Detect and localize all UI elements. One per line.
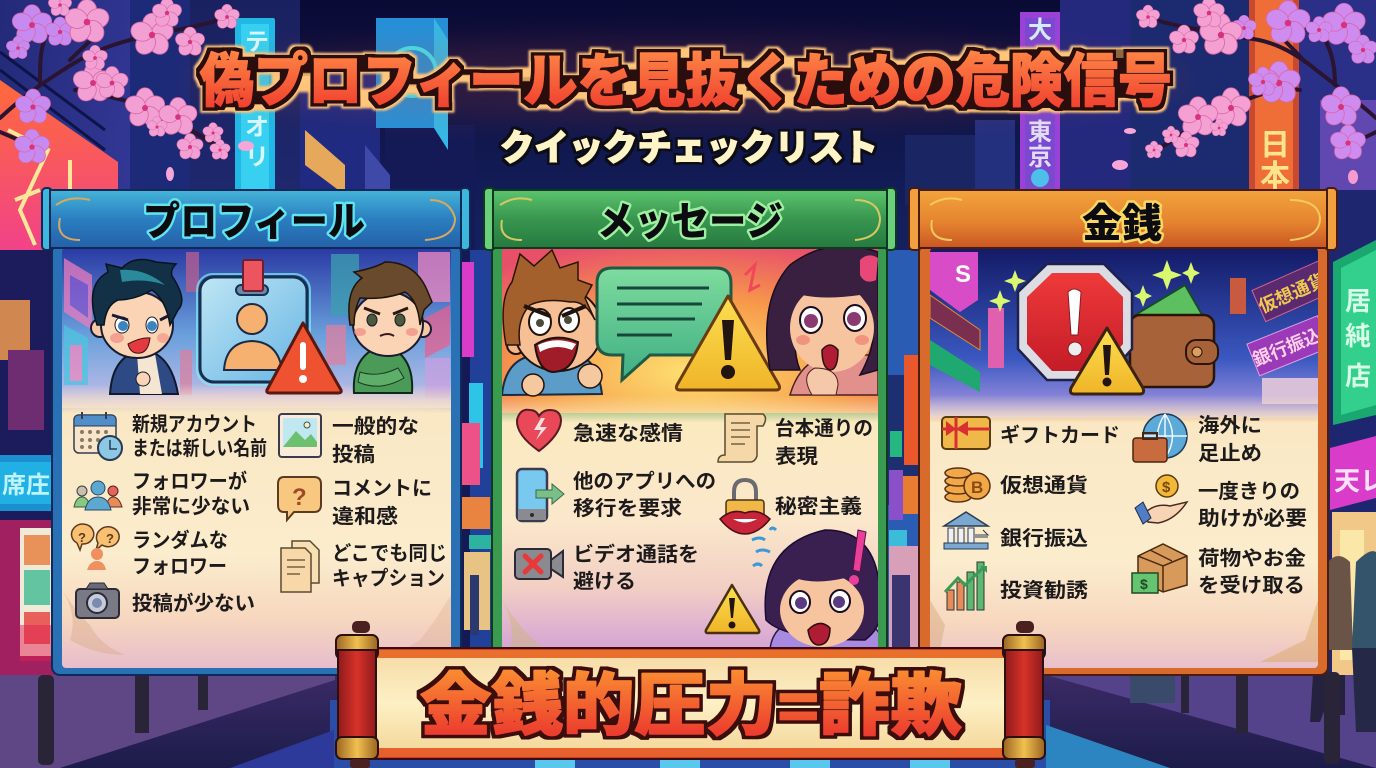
text: one-time help: 一度きりの	[1198, 480, 1300, 503]
title: 偽プロフィールを見抜くための危険信号	[200, 49, 1172, 114]
item: one-time help	[1135, 475, 1307, 530]
text: receiving packages: を受け取る	[1198, 574, 1305, 597]
neon sign: purple Tokyo	[1020, 12, 1060, 192]
icon: picture	[279, 414, 321, 457]
text: secrecy: 秘密主義	[775, 495, 862, 518]
icon: question bubbles and person: ?	[78, 530, 86, 545]
icon: globe and suitcase	[1133, 414, 1187, 462]
neon sign: cyan vertical: テ	[245, 29, 269, 56]
item: scripted	[718, 414, 873, 468]
text: generic posts	[332, 415, 419, 466]
text: crypto: 仮想通貨	[1000, 473, 1088, 497]
posts and bollards	[38, 675, 1248, 765]
text: odd comments: 違和感	[332, 504, 398, 528]
text: one-time help	[1198, 480, 1307, 530]
neon sign: purple Tokyo: 京	[1028, 144, 1052, 171]
text: avoid video: 避ける	[573, 570, 636, 593]
left shopfront strip	[0, 250, 125, 715]
banner body	[375, 648, 1007, 759]
item: random followers	[72, 524, 228, 578]
text: receiving packages: 荷物やお金	[1198, 547, 1306, 570]
text: random followers	[132, 528, 228, 578]
icon: group of people	[74, 481, 122, 510]
icon: lock with lips	[720, 480, 770, 534]
text: investment: 投資勧誘	[1000, 579, 1088, 602]
icon: calendar clock	[74, 412, 122, 460]
panel: money	[909, 188, 1337, 675]
text: stuck overseas	[1198, 414, 1262, 465]
text: one-time help: 助けが必要	[1198, 506, 1307, 530]
text: bank transfer: 銀行振込	[1000, 527, 1088, 550]
icon: hand with coin: $	[1162, 479, 1171, 496]
icon: small warning triangle	[706, 585, 759, 633]
item: new account	[74, 412, 267, 460]
panel frame	[919, 244, 1328, 675]
title glow	[186, 38, 1186, 122]
text: odd comments	[332, 478, 432, 528]
cherry blossoms: top right	[1112, 0, 1376, 184]
icon: small warning triangle	[1070, 328, 1144, 394]
text: app move: 移行を要求	[573, 497, 682, 520]
item: odd comments	[278, 477, 432, 528]
ornaments bottom corners	[62, 590, 125, 655]
icon: question bubbles and person: ?	[106, 531, 114, 546]
neon sign: red left	[0, 80, 118, 262]
neon sign: orange Japan: 日	[1260, 129, 1290, 162]
icon: box and money: $	[1140, 576, 1148, 592]
text: scripted: 表現	[775, 445, 818, 468]
left shopfront strip: 席庄工	[2, 472, 74, 499]
icon: profile ID card with warning	[197, 260, 341, 393]
right shopfront strip: 純	[1345, 321, 1371, 351]
item: gift card	[942, 417, 1120, 449]
panel scene: money: S	[955, 261, 971, 288]
icon: bank	[944, 512, 988, 549]
icon: green speech bubble	[597, 268, 731, 380]
icon: camera	[76, 583, 119, 618]
text: same captions	[332, 542, 447, 590]
item: investment	[945, 562, 1088, 610]
text: app move	[573, 470, 716, 520]
panel scene: money	[930, 248, 1335, 675]
item: receiving packages	[1132, 544, 1306, 597]
panel scene: messages	[502, 246, 886, 670]
item: app move	[517, 469, 716, 521]
subtitle: クイックチェックリスト	[500, 127, 878, 168]
item: few posts	[76, 583, 255, 618]
neon sign: cyan vertical: リ	[245, 144, 269, 171]
neon sign: orange Japan	[1249, 0, 1299, 193]
text: generic posts: 投稿	[332, 443, 375, 466]
street	[0, 675, 1376, 768]
item: secrecy	[720, 480, 862, 534]
neon sign: purple Tokyo: 大	[1028, 17, 1052, 44]
panel: messages	[484, 188, 896, 674]
neon sign: cyan vertical: オ	[245, 114, 269, 141]
text: avoid video	[573, 542, 699, 593]
text: new account: 新規アカウント	[132, 413, 257, 436]
icon: hand with coin	[1135, 475, 1187, 524]
panel scene: profile	[46, 248, 466, 670]
text: receiving packages	[1198, 547, 1306, 597]
panel frame	[52, 244, 461, 675]
text: gift card: ギフトカード	[1000, 424, 1120, 447]
icon: documents	[281, 541, 319, 592]
icon: question speech bubble	[278, 477, 321, 520]
item: few followers	[74, 469, 250, 518]
item: stuck overseas	[1133, 414, 1262, 465]
icon: gift card	[942, 417, 990, 449]
header: money	[909, 188, 1337, 250]
right shopfront strip	[1326, 190, 1376, 682]
header: profile	[42, 188, 470, 250]
neon sign: purple Tokyo: 東	[1028, 119, 1052, 146]
character: worried girl	[752, 528, 886, 650]
text: avoid video: ビデオ通話を	[573, 542, 699, 566]
header: messages	[484, 188, 896, 250]
character: angry boy	[502, 250, 602, 396]
text: few followers: 非常に少ない	[132, 495, 250, 518]
header: money: 金銭	[1082, 202, 1162, 246]
text: app move: 他のアプリへの	[573, 470, 716, 493]
item: rapid emotion	[517, 410, 683, 451]
icon: wallet with money	[1130, 285, 1218, 387]
item: avoid video	[515, 542, 699, 593]
text: few followers: フォロワーが	[132, 469, 247, 493]
panel scene: money: 銀行振込	[1250, 325, 1324, 370]
text: new account	[132, 413, 267, 460]
neon sign: cyan vertical	[235, 18, 275, 193]
text: scripted: 台本通りの	[775, 417, 873, 440]
icon: question speech bubble: ?	[292, 484, 307, 511]
item: crypto	[945, 468, 1088, 502]
header: messages: メッセージ	[597, 200, 783, 244]
text: new account: または新しい名前	[132, 437, 267, 460]
panel: profile	[42, 188, 470, 675]
text: stuck overseas: 海外に	[1198, 414, 1262, 437]
character: talking boy	[91, 260, 182, 394]
cherry blossoms: top left	[0, 0, 254, 181]
icon: coins: B	[971, 478, 983, 497]
item: bank transfer	[944, 512, 1088, 550]
icon: yellow warning triangle	[676, 296, 780, 390]
icon: stop sign	[1018, 264, 1132, 380]
right shopfront strip: 居	[1345, 286, 1371, 316]
icon: sparkles	[989, 260, 1200, 312]
gap neon signs between panels	[462, 262, 920, 656]
silhouettes of pedestrians	[1310, 551, 1376, 764]
icon: growth chart	[945, 562, 987, 610]
text: random followers: フォロワー	[132, 556, 227, 578]
text: few followers	[132, 469, 250, 518]
character: shocked girl	[745, 246, 878, 395]
text: odd comments: コメントに	[332, 478, 432, 500]
icon: question bubbles and person	[72, 524, 119, 570]
icon: phone with arrow	[517, 469, 564, 521]
character: frowning boy	[349, 262, 432, 393]
icon: crossed video camera	[515, 549, 563, 579]
header: profile: プロフィール	[143, 200, 365, 244]
neon sign: cyan square	[376, 18, 448, 150]
neon sign: orange Japan: 本	[1260, 160, 1290, 193]
item: same captions	[281, 541, 447, 592]
text: same captions: どこでも同じ	[332, 542, 447, 565]
icon: broken heart	[517, 410, 561, 451]
text: few posts: 投稿が少ない	[132, 591, 255, 615]
icon: coins	[945, 468, 990, 502]
panel frame	[492, 244, 887, 674]
icon: box and money	[1132, 544, 1187, 593]
slogan: 金銭的圧力=詐欺	[420, 668, 962, 744]
right roller	[1003, 621, 1045, 768]
right shopfront strip: 店	[1345, 361, 1371, 391]
text: stuck overseas: 足止め	[1198, 442, 1262, 465]
bottom banner scroll	[336, 621, 1045, 768]
text: same captions: キャプション	[332, 567, 445, 590]
icon: paper scroll	[718, 414, 766, 462]
text: random followers: ランダムな	[132, 528, 228, 552]
left roller	[336, 621, 378, 768]
text: generic posts: 一般的な	[332, 415, 419, 438]
item: generic posts	[279, 414, 419, 466]
text: rapid emotion: 急速な感情	[573, 421, 683, 445]
panel scene: money: 仮想通貨	[1255, 269, 1329, 317]
text: scripted	[775, 417, 873, 468]
